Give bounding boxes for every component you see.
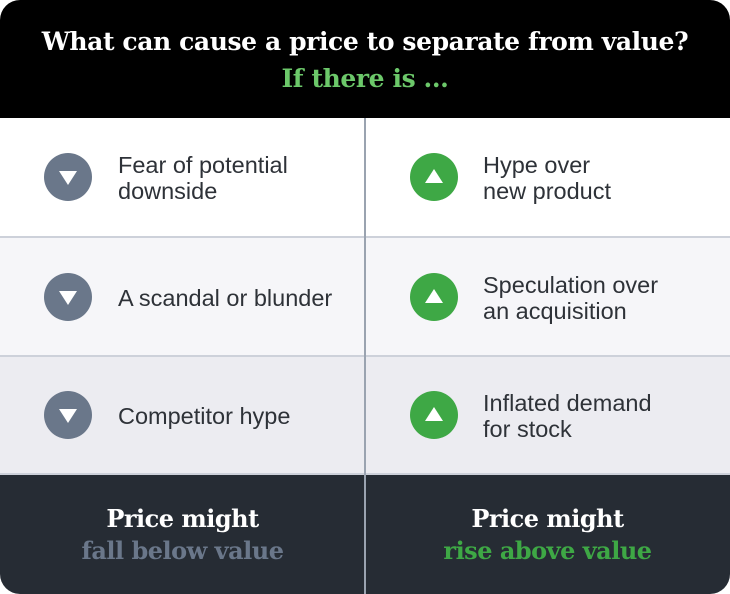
text: speculation: Speculation over [483,272,658,298]
footer left: Price might [106,504,259,533]
text: hype: new product [483,178,611,204]
footer right [443,504,652,565]
title: What can cause a price to separate from value? [42,27,688,56]
footer right: rise above value [443,536,652,565]
icon: down arrow [44,272,92,320]
text: speculation: an acquisition [483,298,627,324]
footer left [82,504,284,565]
header [0,0,730,118]
icon: up arrow [410,153,458,201]
row 3 [0,357,730,475]
text: hype [483,152,611,204]
icon: down arrow [44,153,92,201]
icon: up arrow [410,272,458,320]
text: competitor: Competitor hype [118,403,290,429]
text: fear: Fear of potential [118,152,288,178]
text: scandal: A scandal or blunder [118,284,332,310]
text: inflated [483,390,652,442]
footer [0,475,730,594]
row 2 [0,238,730,357]
footer right: Price might [471,504,624,533]
text: speculation [483,272,658,324]
text: fear: downside [118,178,217,204]
text: inflated: for stock [483,416,572,442]
row 1 [0,118,730,238]
footer left: fall below value [82,536,284,565]
text: fear [118,152,288,204]
text: hype: Hype over [483,152,590,178]
text: inflated: Inflated demand [483,390,652,416]
subtitle: If there is ... [282,64,448,93]
icon: up arrow [410,391,458,439]
icon: down arrow [44,391,92,439]
